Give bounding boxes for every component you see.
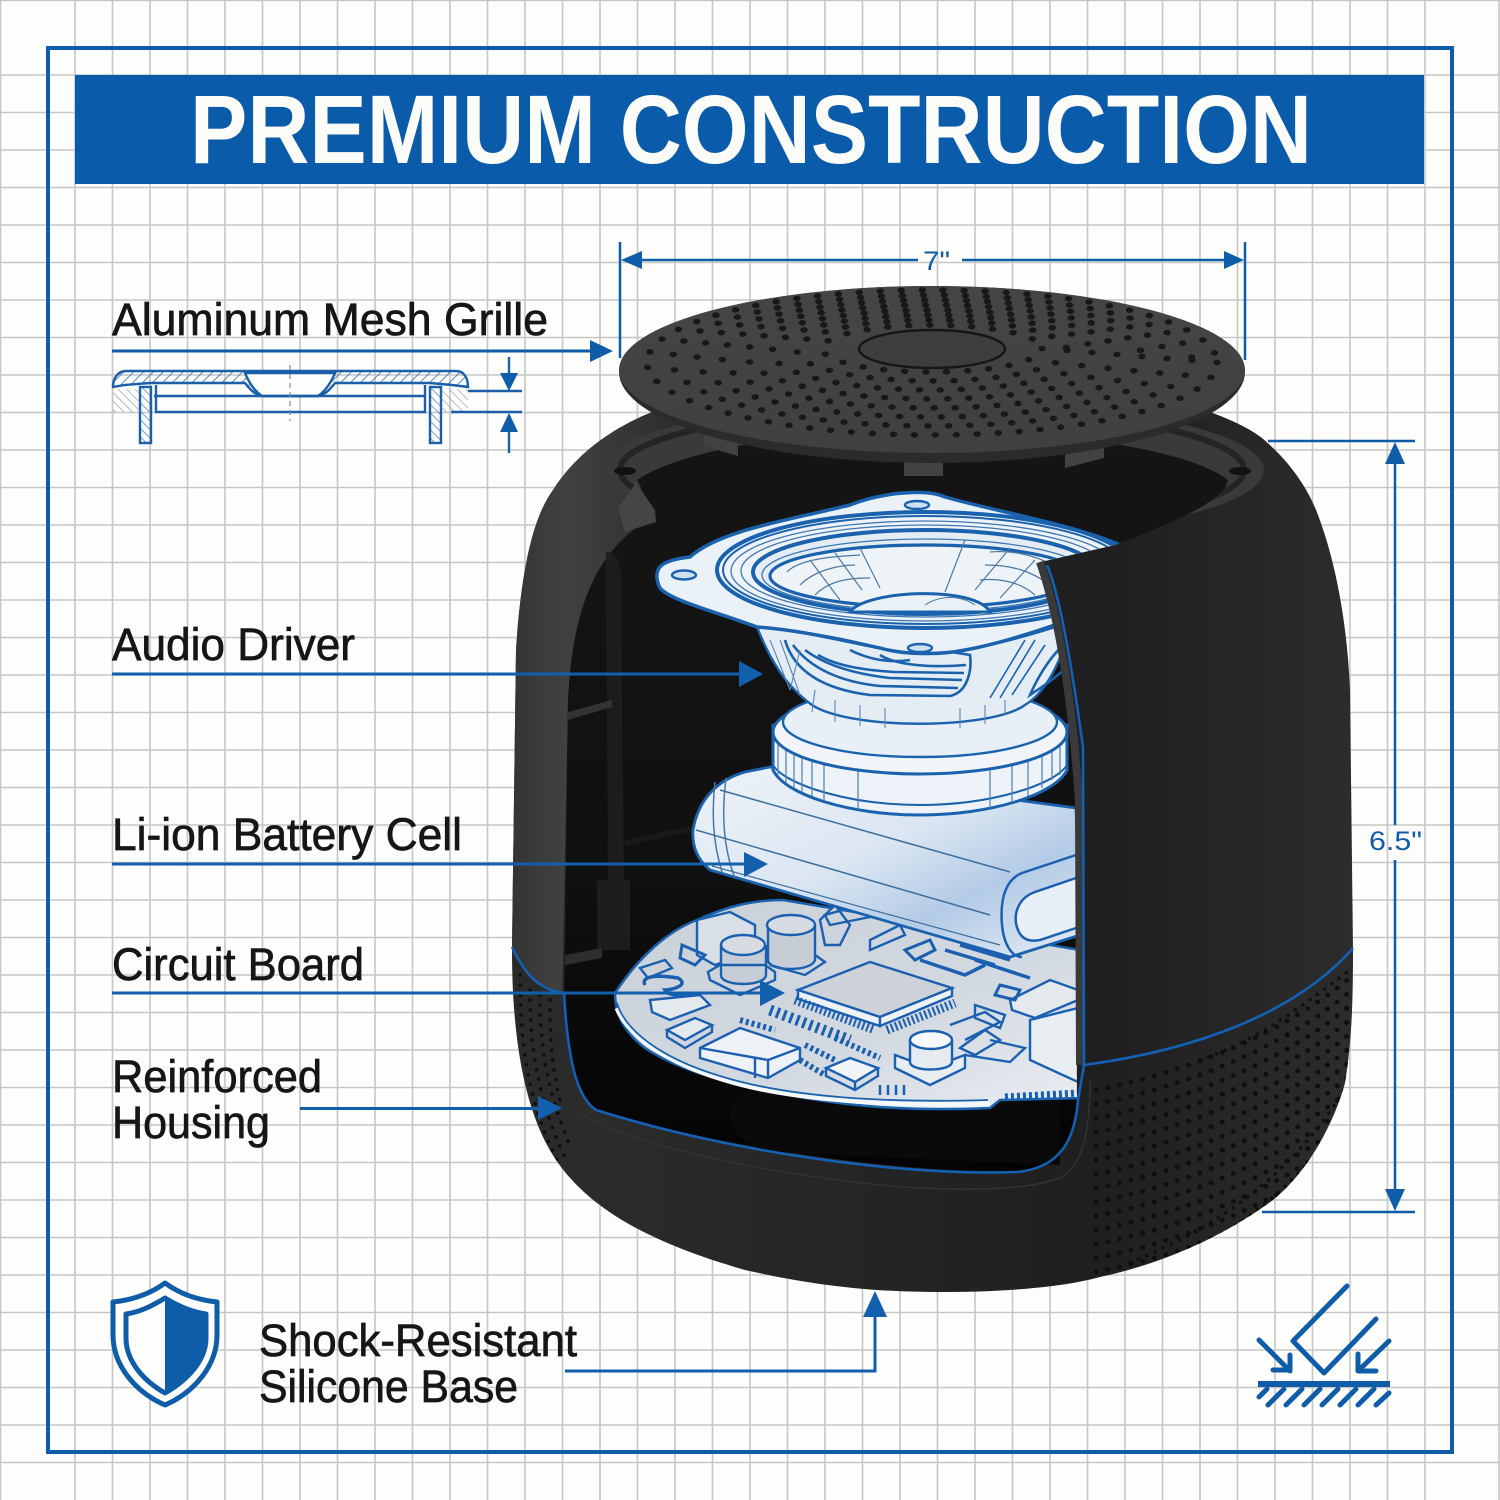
icon: compression symbol <box>1258 1286 1390 1405</box>
label: reinforced housing: Housing <box>112 1097 270 1148</box>
label: aluminum mesh grille <box>112 294 613 362</box>
icon: shield <box>113 1283 217 1405</box>
top mesh grille <box>619 286 1245 463</box>
speaker frame and cone <box>657 492 1130 654</box>
arrow: circuit board <box>112 980 785 1006</box>
magnet <box>773 725 1067 815</box>
label: reinforced housing: Reinforced <box>112 1051 322 1102</box>
dimension: width 7 inch <box>620 242 1245 360</box>
height value: 6.5" <box>1369 826 1422 856</box>
inner cavity <box>564 430 1228 1172</box>
mounting holes <box>905 501 929 509</box>
label: shock-resistant silicone base: Shock-Resistant <box>259 1315 577 1366</box>
label: circuit board: Circuit Board <box>112 939 364 990</box>
label: battery: Li-ion Battery Cell <box>112 809 462 860</box>
arrow: audio driver <box>112 661 763 687</box>
width value: 7" <box>923 246 950 276</box>
arrow: silicone base <box>565 1291 887 1371</box>
dimension: height 6.5 inch <box>1262 441 1422 1212</box>
rim notch <box>618 483 656 532</box>
lower bevel highlight <box>578 1080 1090 1189</box>
basket <box>756 628 1060 725</box>
speaker cutaway illustration <box>512 286 1353 1292</box>
blue section outline <box>512 565 1353 1172</box>
main chip <box>798 962 952 1017</box>
inner ribs <box>565 552 1060 1165</box>
title: PREMIUM CONSTRUCTION <box>190 75 1312 184</box>
label: audio driver: Audio Driver <box>112 619 355 670</box>
left wall highlight <box>512 400 690 993</box>
label: aluminum mesh grille: Aluminum Mesh Grille <box>112 294 548 345</box>
label: shock-resistant silicone base: Silicone Base <box>259 1361 518 1412</box>
cut edge strip <box>1040 562 1080 1065</box>
grille cross-section drawing <box>113 357 522 453</box>
board details <box>644 976 700 998</box>
circuit board <box>615 900 1080 1109</box>
arrow: battery <box>112 852 768 877</box>
centre disc <box>859 330 1005 368</box>
speaker body <box>512 400 1353 1292</box>
top rim ledge <box>614 425 1264 514</box>
grille tabs <box>704 432 1104 476</box>
battery cell <box>693 767 1080 957</box>
capacitors <box>697 912 755 965</box>
arrow: grille <box>112 340 613 362</box>
audio driver <box>657 492 1133 815</box>
title banner <box>75 75 1424 184</box>
arrow: housing <box>300 1096 562 1120</box>
base perforations right <box>1096 968 1353 1284</box>
base perforations left <box>520 975 572 1165</box>
